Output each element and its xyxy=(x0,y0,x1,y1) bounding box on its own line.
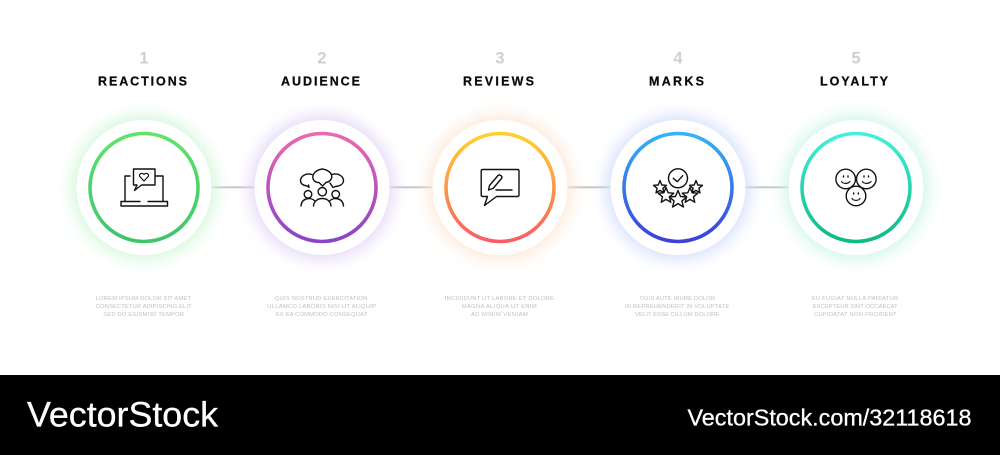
description text: INCIDIDUNT UT LABORE ET DOLORE xyxy=(445,296,554,302)
description text: SED DO EIUSMOD TEMPOR xyxy=(103,312,184,318)
heading: loyalty: LOYALTY xyxy=(820,74,889,88)
description text xyxy=(267,296,376,318)
step number 3: 3 xyxy=(495,50,505,68)
footer watermark bar xyxy=(0,375,1000,455)
step number 5: 5 xyxy=(851,50,861,68)
badge: purple ring xyxy=(250,116,394,260)
heading: reviews: REVIEWS xyxy=(463,74,534,88)
badge: orange ring xyxy=(428,116,572,260)
description text: QUIS NOSTRUD EXERCITATION xyxy=(275,296,367,302)
description text: VELIT ESSE CILLUM DOLORE xyxy=(635,312,719,318)
icon: check mark above five stars xyxy=(654,169,702,207)
badge: blue ring xyxy=(606,116,750,260)
description text: AD MINIM VENIAM xyxy=(471,312,528,318)
watermark logo text: VectorStock xyxy=(27,396,219,435)
description text xyxy=(445,296,554,318)
description text: LOREM IPSUM DOLOR SIT AMET xyxy=(96,296,191,302)
badge: teal ring xyxy=(784,116,928,260)
description text: ULLAMCO LABORIS NISI UT ALIQUIP xyxy=(267,304,376,310)
badge: green ring xyxy=(72,116,216,260)
step number 1: 1 xyxy=(139,50,149,68)
icon: speech bubble with pencil xyxy=(481,170,519,206)
description text xyxy=(625,296,729,318)
icon: laptop with heart speech bubble xyxy=(121,169,168,206)
description text xyxy=(96,296,192,318)
description text: IN REPREHENDERIT IN VOLUPTATE xyxy=(625,304,729,310)
panel: audience xyxy=(250,50,394,318)
description text: CONSECTETUR ADIPISCING ELIT xyxy=(96,304,192,310)
icon: three smiling faces xyxy=(836,169,876,206)
description text: CUPIDATAT NON PROIDENT xyxy=(814,312,897,318)
panel: reviews xyxy=(428,50,572,318)
description text: DUIS AUTE IRURE DOLOR xyxy=(640,296,715,302)
panel: loyalty xyxy=(784,50,928,318)
connector lines xyxy=(205,186,799,188)
step number 2: 2 xyxy=(317,50,327,68)
description text: MAGNA ALIQUA UT ENIM xyxy=(462,304,537,310)
description text xyxy=(812,296,898,318)
icon: group of people with speech bubbles xyxy=(300,169,344,206)
heading: reactions: REACTIONS xyxy=(98,74,187,88)
step number 4: 4 xyxy=(673,50,683,68)
description text: EU FUGIAT NULLA PARIATUR xyxy=(812,296,898,302)
panel: reactions xyxy=(72,50,216,318)
description text: EXCEPTEUR SINT OCCAECAT xyxy=(813,304,898,310)
heading: marks: MARKS xyxy=(649,74,704,88)
watermark image id text: VectorStock.com/32118618 xyxy=(688,405,972,431)
heading: audience: AUDIENCE xyxy=(281,74,360,88)
description text: EX EA COMMODO CONSEQUAT xyxy=(276,312,368,318)
panel: marks xyxy=(606,50,750,318)
